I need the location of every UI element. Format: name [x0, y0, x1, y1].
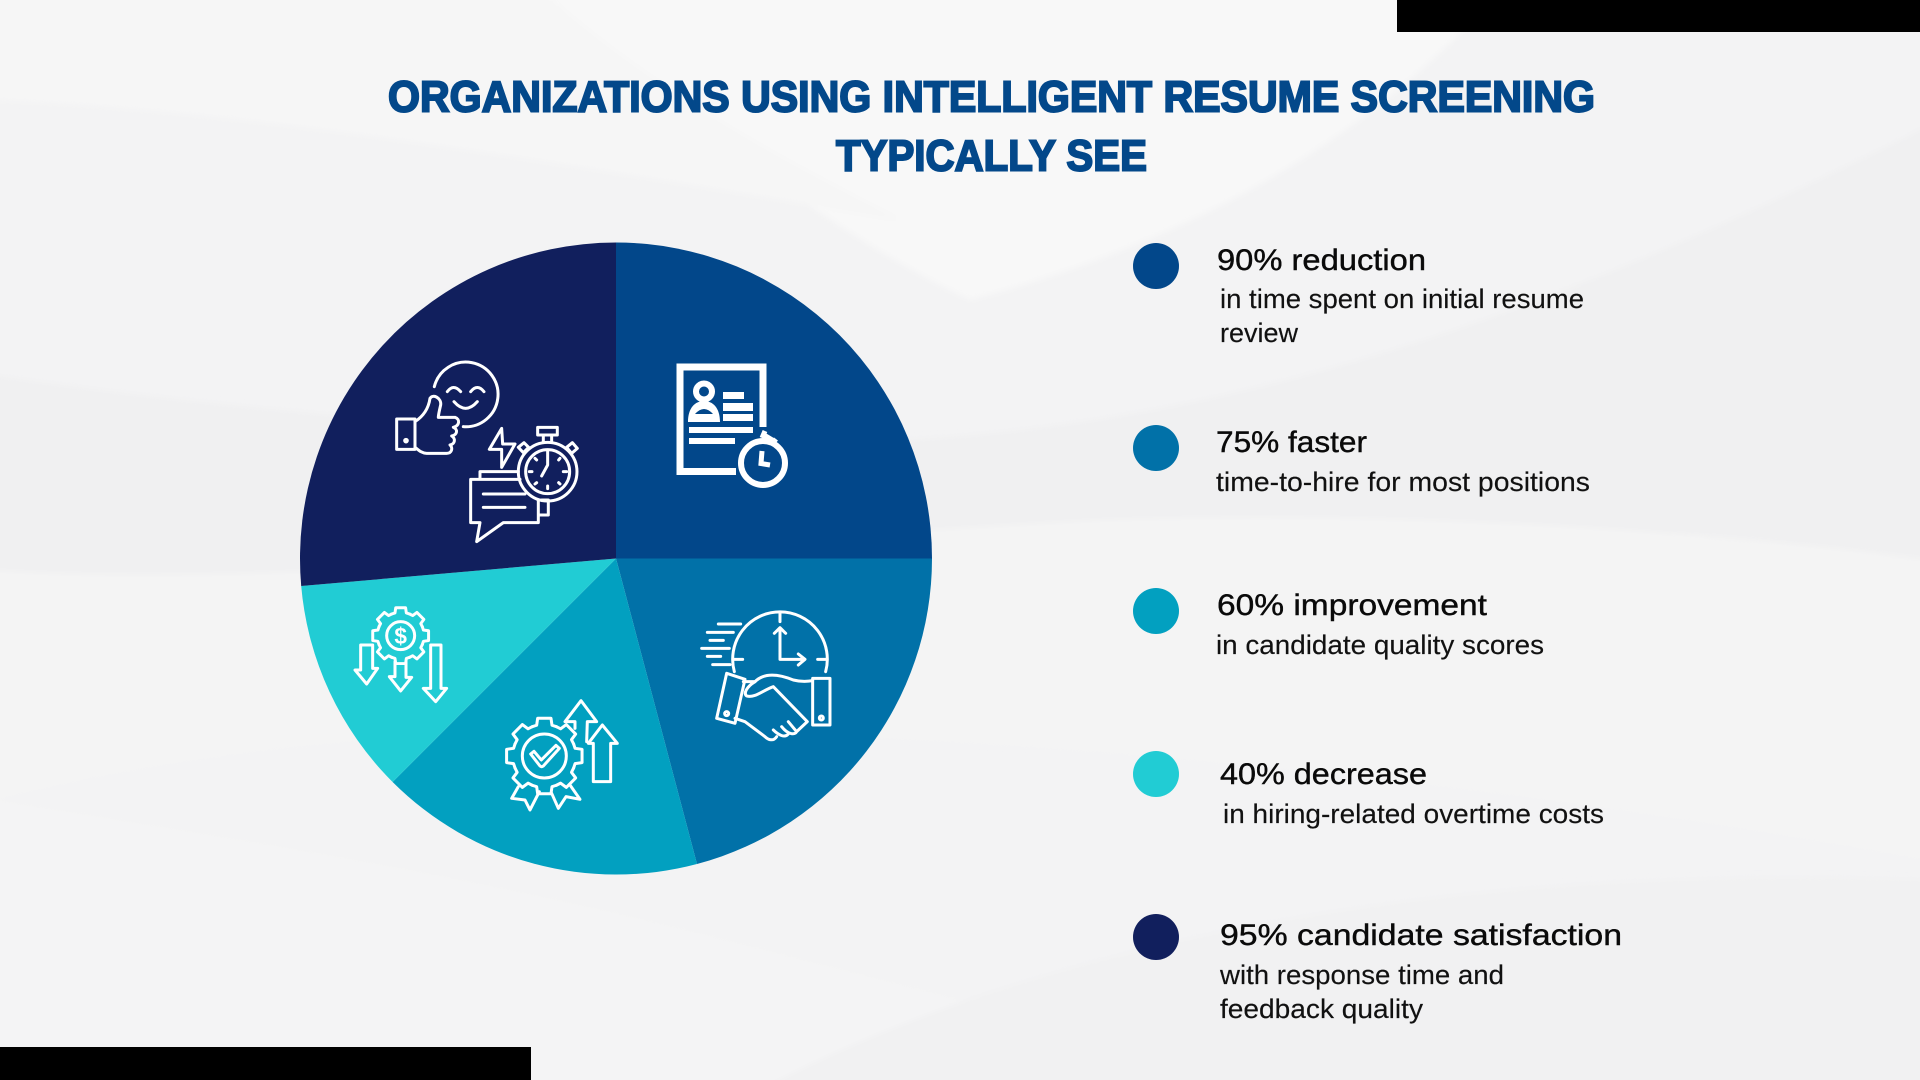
item 2: [1133, 425, 1590, 497]
title: TYPICALLY SEE: [836, 132, 1147, 180]
description: review: [1220, 318, 1299, 348]
icon: resume with stopwatch: [680, 367, 785, 485]
dot: [1133, 751, 1179, 797]
item 4: [1133, 751, 1604, 829]
dot: [1133, 243, 1179, 289]
heading: 75% faster: [1216, 426, 1367, 459]
heading: 90% reduction: [1217, 244, 1426, 277]
item 3: [1133, 588, 1544, 660]
slice: 90: [616, 242, 932, 558]
description: time-to-hire for most positions: [1216, 467, 1590, 497]
heading: 40% decrease: [1220, 758, 1427, 791]
black bar: bottom left: [0, 1047, 531, 1080]
slice: 40: [301, 558, 616, 782]
description: in hiring-related overtime costs: [1223, 799, 1604, 829]
description: feedback quality: [1220, 994, 1424, 1024]
heading: 95% candidate satisfaction: [1220, 919, 1622, 952]
description: in candidate quality scores: [1216, 630, 1544, 660]
icon: clock and handshake: [702, 612, 830, 740]
pie chart: [300, 242, 932, 875]
slice: 60: [393, 558, 697, 875]
item 1: [1133, 243, 1584, 348]
title: [388, 72, 1595, 180]
slice: 75: [616, 558, 932, 864]
item 5: [1133, 914, 1622, 1024]
black bar: top right: [1397, 0, 1920, 32]
description: with response time and: [1219, 960, 1504, 990]
icon: cost gear with down arrows: $: [394, 623, 407, 649]
description: in time spent on initial resume: [1220, 284, 1584, 314]
dot: [1133, 588, 1179, 634]
title: ORGANIZATIONS USING INTELLIGENT RESUME SCREENING: [388, 72, 1595, 122]
dot: [1133, 425, 1179, 471]
dot: [1133, 914, 1179, 960]
slice: 95: [300, 242, 616, 586]
heading: 60% improvement: [1217, 589, 1488, 622]
icon: cost gear with down arrows: [355, 608, 447, 702]
icon: thumbs up, smile, stopwatch and chat: [397, 362, 577, 542]
icon: gear with check and up arrows: [507, 701, 617, 810]
